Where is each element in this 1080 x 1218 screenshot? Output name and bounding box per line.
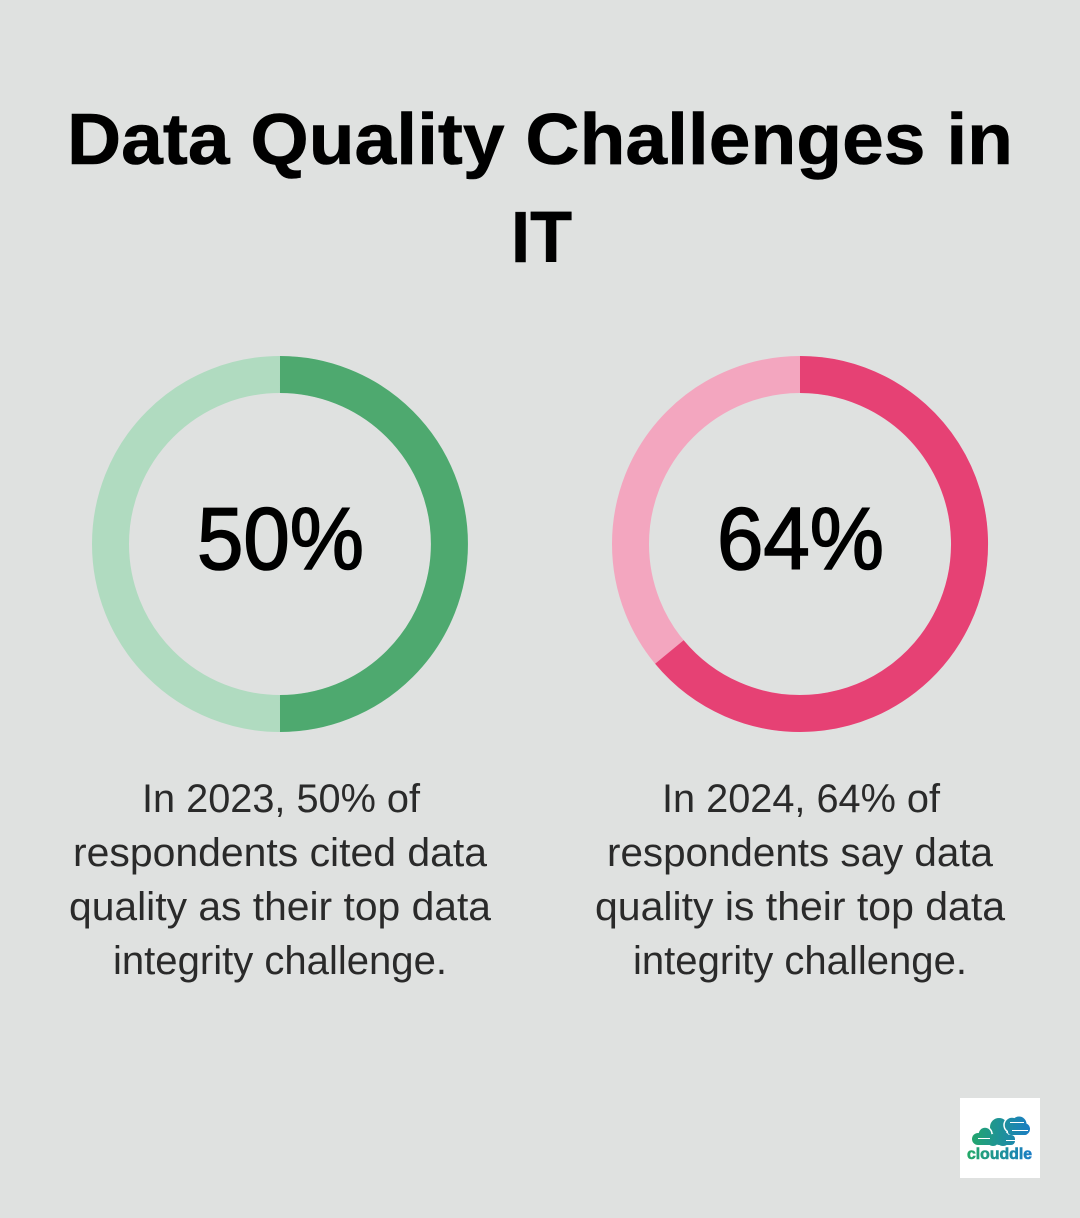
- text block: 2024 statistic: respondents say data: [607, 831, 994, 875]
- text block: 2023 statistic: integrity challenge.: [113, 939, 447, 983]
- text block: 2024 statistic: quality is their top data: [595, 885, 1006, 929]
- donut chart: 50%: [110, 374, 450, 714]
- logo wordmark: clouddle: [967, 1146, 1032, 1163]
- donut chart: 50%: 50%: [197, 489, 364, 588]
- text block: 2024 statistic: integrity challenge.: [633, 939, 967, 983]
- text block: 2023 statistic: quality as their top data: [69, 885, 492, 929]
- title: Data Quality Challenges in: [67, 100, 1013, 180]
- title: IT: [511, 198, 572, 278]
- text block: 2023 statistic: respondents cited data: [73, 831, 488, 875]
- title: [67, 100, 1013, 278]
- icon: cloud mark: [972, 1116, 1030, 1146]
- text block: 2023 statistic: [69, 777, 492, 983]
- logo: clouddle: [960, 1098, 1040, 1178]
- donut chart: 64%: 64%: [717, 489, 884, 588]
- text block: 2024 statistic: [595, 777, 1006, 983]
- donut chart: 64%: [630, 374, 970, 714]
- text block: 2023 statistic: In 2023, 50% of: [142, 777, 421, 821]
- text block: 2024 statistic: In 2024, 64% of: [662, 777, 941, 821]
